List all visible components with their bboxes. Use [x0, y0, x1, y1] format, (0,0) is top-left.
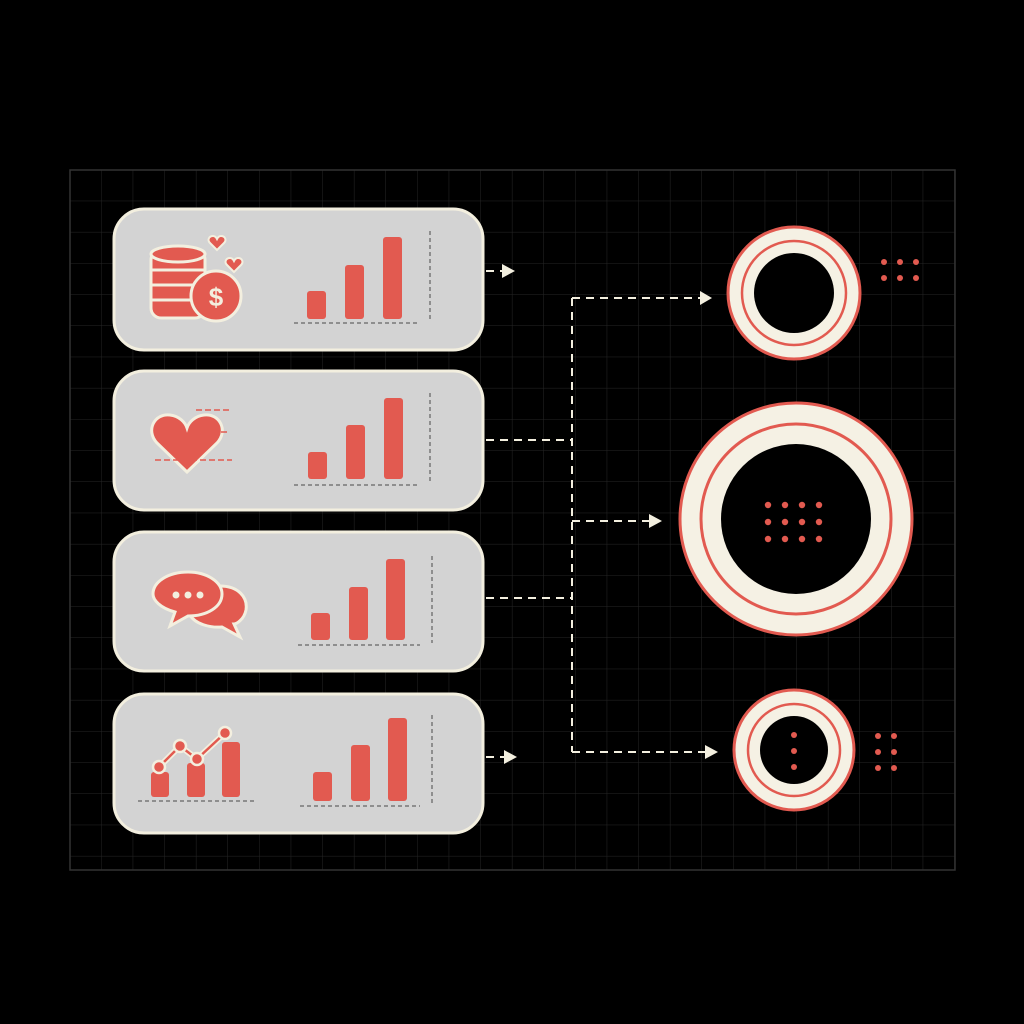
- bar chart: [298, 556, 432, 645]
- dots grid: [765, 502, 822, 542]
- ring: bottom: [734, 690, 897, 810]
- arrowheads: [502, 264, 718, 764]
- ring: middle: [680, 403, 912, 635]
- icon: coins stack with dollar: $: [209, 282, 224, 312]
- panel 2: likes: [114, 371, 483, 510]
- dots: [881, 259, 919, 281]
- icon: heart: [152, 410, 232, 472]
- ring: top: [728, 227, 919, 359]
- icon: trend chart: [138, 727, 256, 801]
- bar chart: [294, 231, 430, 323]
- panel 3: comments: [114, 532, 483, 671]
- panel 4: growth: [114, 694, 483, 833]
- dots: [791, 732, 897, 771]
- panel 1: revenue: [114, 209, 483, 350]
- connectors: dashed lines: [486, 271, 706, 757]
- icon: chat bubbles: [153, 572, 246, 637]
- icon: coins stack with dollar: [151, 236, 242, 321]
- bar chart: [300, 715, 432, 806]
- bar chart: [294, 393, 430, 485]
